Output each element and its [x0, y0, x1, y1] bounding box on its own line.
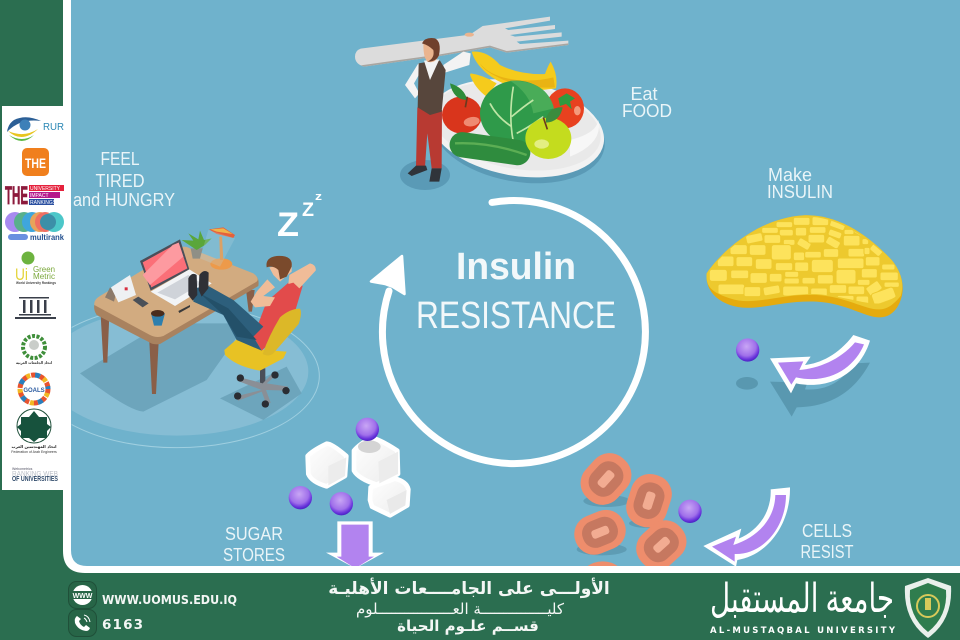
label: FEEL TIRED and HUNGRY: FEEL [100, 149, 140, 169]
label: FEEL TIRED and HUNGRY [73, 149, 175, 210]
logo: Arab universities wreath [16, 336, 53, 365]
desk [94, 247, 259, 344]
cell 1 [580, 453, 632, 505]
cell shadows [576, 496, 650, 556]
down arrow [326, 521, 384, 568]
head [423, 43, 438, 62]
purple curved arrow [703, 487, 790, 567]
illustration: man with fork and plate of food [355, 17, 613, 196]
website: WWW.UOMUS.EDU.IQ [102, 592, 237, 607]
pancreas [706, 215, 903, 317]
icon: Z z z: z [315, 191, 323, 203]
logo: Federation of Arab Engineers: Federation of Arab Engineers [11, 450, 57, 454]
molecule right [330, 492, 353, 515]
coffee cup [151, 310, 165, 326]
logo: UI GreenMetric: World University Rankings [16, 281, 56, 285]
pen [178, 305, 190, 313]
footer: Arabic college text [328, 578, 610, 635]
cabbage [480, 81, 554, 146]
fork [355, 17, 568, 67]
label: Eat FOOD: FOOD [622, 101, 672, 121]
red apple [442, 83, 482, 134]
shoes [188, 274, 197, 301]
cube back right [370, 479, 408, 515]
label: Make INSULIN: Make [768, 165, 812, 185]
floor circle [72, 312, 308, 436]
cell 4 [636, 520, 686, 566]
latin name: AL-MUSTAQBAL UNIVERSITY [710, 626, 896, 636]
icon: Z z z [277, 191, 323, 244]
legs [193, 286, 263, 351]
man [188, 256, 316, 351]
logo: Ranking Web of Universities [12, 467, 58, 483]
logo: UI GreenMetric: Metric [33, 272, 55, 281]
logo: multirank [5, 212, 65, 242]
cube left [308, 444, 346, 486]
head [269, 263, 292, 282]
logo: Ranking Web of Universities: OF UNIVERSITIES [12, 476, 58, 483]
phone number: 6163 [102, 617, 143, 633]
icon: Z z z: Z [302, 200, 314, 221]
logo: THE impact rankings: RANKINGS [30, 200, 57, 206]
icon: phone [68, 610, 96, 636]
cube top [354, 438, 398, 485]
logo: UI GreenMetric [15, 252, 56, 285]
footer: Arabic college text: الأولـــى على الجامــــعات الأهليـة [328, 578, 610, 599]
panel: accreditation logos [2, 106, 71, 490]
logo: RUR: RUR [43, 122, 64, 133]
title: Insulin RESISTANCE [416, 246, 616, 337]
logo: THE orange: THE [25, 155, 46, 171]
icon: www: WWW [73, 593, 93, 600]
cell 2 [626, 474, 672, 528]
desk shadow [80, 323, 302, 420]
trousers [416, 107, 442, 168]
molecule top [356, 418, 379, 441]
illustration: cells and purple arrow [574, 453, 790, 566]
label: SUGAR STORES: STORES [223, 545, 285, 565]
chair base [224, 339, 290, 408]
cucumber [448, 130, 532, 167]
footer: university logo [710, 567, 951, 638]
insulin molecule [736, 338, 759, 362]
torso [253, 278, 303, 351]
logo: Ranking Web of Universities: RANKING WEB [12, 471, 58, 478]
man's floor shadow [400, 160, 450, 190]
label: SUGAR STORES [223, 524, 285, 565]
illustration: sugar cubes and down arrow [289, 418, 408, 568]
icon: www [68, 582, 96, 608]
arms [251, 263, 316, 307]
logo: THE impact rankings: IMPACT [30, 193, 49, 199]
label: Make INSULIN [767, 165, 833, 202]
label: FEEL TIRED and HUNGRY: TIRED [96, 171, 145, 191]
label: FEEL TIRED and HUNGRY: and HUNGRY [73, 190, 175, 210]
phone [133, 297, 149, 307]
lamp [200, 227, 235, 270]
label: SUGAR STORES: SUGAR [225, 524, 283, 544]
logo: UI GreenMetric: Ui [15, 265, 28, 284]
footer: contact [68, 582, 237, 636]
logo: multirank: multirank [30, 233, 65, 242]
cell 3 [574, 510, 626, 555]
title: Insulin RESISTANCE: RESISTANCE [416, 295, 616, 337]
illustration: man resting at desk [72, 227, 320, 448]
green apple [525, 107, 571, 159]
molecule shadow [736, 377, 758, 390]
logo: SDG ring: GOALS [23, 388, 45, 394]
label: Eat FOOD: Eat [630, 84, 658, 104]
cycle circle arrow [371, 201, 645, 464]
tomato [546, 88, 584, 128]
logo: UI GreenMetric: Green [33, 265, 55, 274]
vest [418, 61, 446, 115]
cell 5 [588, 561, 618, 566]
plate [421, 66, 613, 196]
illustration: pancreas and purple arrow [706, 215, 903, 417]
label: CELLS RESIST INSULIN: INSULIN [794, 563, 860, 583]
logo: THE orange [22, 148, 49, 176]
footer: Arabic college text: قســم علـوم الحياة [397, 617, 539, 635]
label: Eat FOOD [622, 84, 672, 121]
logo: THE impact rankings: UNIVERSITY [30, 186, 61, 192]
purple curved arrow [770, 335, 870, 393]
calendar [105, 275, 136, 302]
logo: Arab universities wreath: اتحاد الجامعات العربية [16, 360, 53, 365]
insulin molecule [678, 500, 702, 523]
logo: temple [15, 297, 56, 319]
logo: Federation of Arab Engineers [11, 409, 57, 454]
shield [905, 578, 951, 638]
chair back [263, 309, 301, 356]
logo: THE impact rankings: THE [5, 182, 28, 210]
logo: Federation of Arab Engineers: اتحاد المهندسين العرب [11, 444, 57, 449]
footer: Arabic college text: كليـــــــــــــــة العـــــــــــــــــلوم [356, 600, 565, 618]
logo: Ranking Web of Universities: Webometrics [12, 467, 33, 471]
desk legs [101, 290, 255, 394]
title: Insulin RESISTANCE: Insulin [456, 246, 576, 288]
label: Make INSULIN: INSULIN [767, 182, 833, 202]
arm and shirt [405, 52, 471, 98]
laptop [140, 239, 212, 306]
label: CELLS RESIST INSULIN [802, 524, 854, 558]
label: CELLS RESIST INSULIN: CELLS [802, 521, 852, 541]
label: CELLS RESIST INSULIN: RESIST [800, 542, 854, 562]
logo: RUR [7, 117, 64, 141]
floor rings [72, 314, 320, 448]
molecule left [289, 486, 312, 509]
shoes [408, 166, 442, 182]
man [355, 17, 568, 182]
banana [470, 51, 557, 97]
icon: Z z z: Z [277, 206, 299, 244]
plant [182, 231, 212, 259]
logo: SDG ring [20, 375, 48, 403]
arrow shadow [770, 363, 870, 417]
